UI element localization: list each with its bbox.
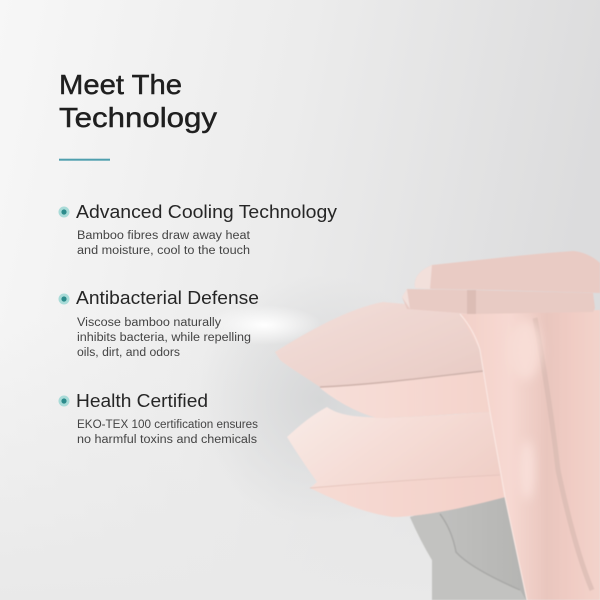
description: inhibits bacteria, while repelling bbox=[77, 332, 251, 344]
heading: Antibacterial Defense bbox=[76, 288, 259, 308]
icon: teal bullet bbox=[58, 396, 70, 406]
description bbox=[77, 317, 251, 359]
feature: health certified bbox=[58, 391, 258, 446]
upper pillow flap bbox=[320, 372, 490, 418]
folded sheet top bbox=[415, 251, 600, 293]
description: Viscose bamboo naturally bbox=[77, 317, 221, 329]
title: Meet The bbox=[59, 69, 182, 100]
title bbox=[59, 69, 217, 133]
description: Bamboo fibres draw away heat bbox=[77, 230, 251, 242]
icon: teal bullet bbox=[58, 294, 70, 304]
title divider bbox=[59, 159, 110, 161]
lower pillow bbox=[287, 407, 505, 517]
icon: teal bullet bbox=[58, 206, 70, 218]
draped sheet bbox=[460, 310, 600, 600]
description bbox=[77, 419, 258, 446]
description bbox=[77, 230, 251, 257]
description: EKO-TEX 100 certification ensures bbox=[77, 419, 258, 431]
folded sheet second layer bbox=[402, 289, 595, 314]
feature: advanced cooling bbox=[58, 202, 337, 257]
heading: Advanced Cooling Technology bbox=[76, 202, 337, 222]
feature: antibacterial bbox=[58, 288, 259, 359]
description: and moisture, cool to the touch bbox=[77, 245, 250, 257]
photo: pink bedding stacked on stone stand bbox=[275, 251, 600, 600]
upper pillow bbox=[275, 302, 493, 418]
stone stand bbox=[410, 495, 530, 600]
description: oils, dirt, and odors bbox=[77, 347, 180, 359]
description: no harmful toxins and chemicals bbox=[77, 434, 257, 446]
title: Technology bbox=[59, 102, 217, 133]
heading: Health Certified bbox=[76, 391, 208, 411]
lower pillow flap bbox=[310, 475, 505, 517]
